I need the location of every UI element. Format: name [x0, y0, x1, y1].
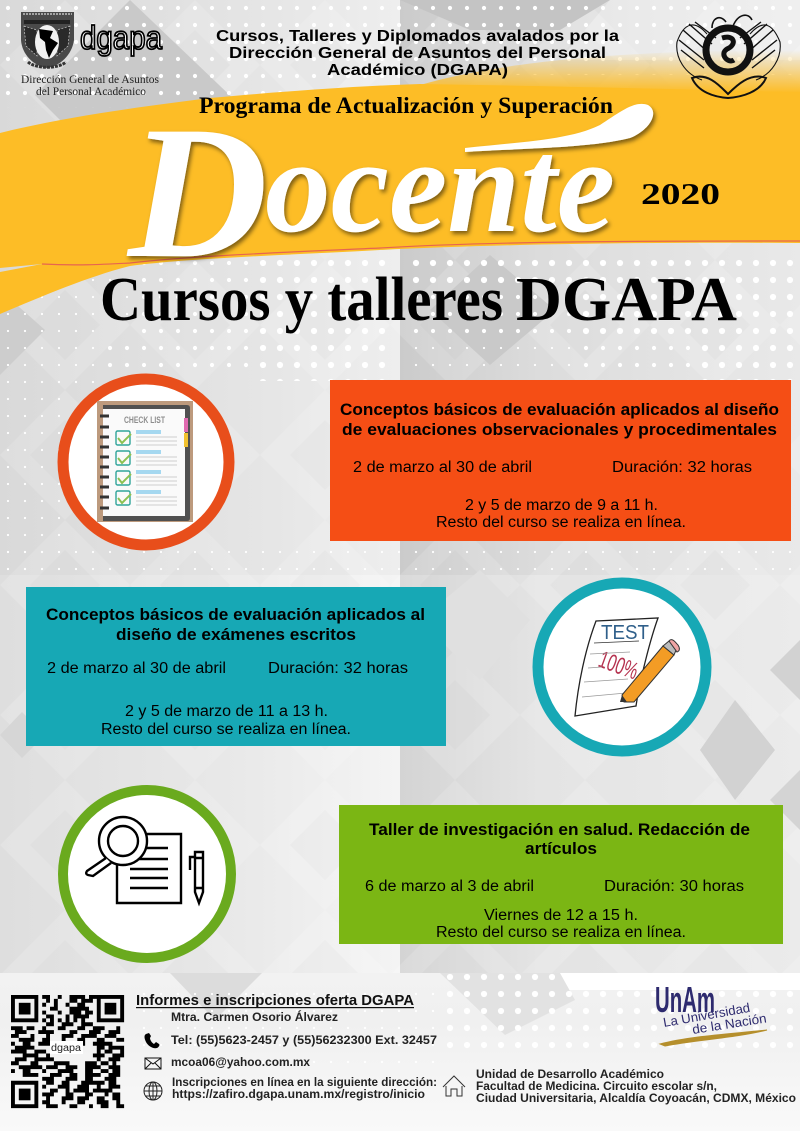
- panel: curso 1: de evaluaciones observacionales y procedimentales: [342, 420, 777, 439]
- panel: curso 1: Resto del curso se realiza en línea.: [436, 514, 686, 531]
- logo: UNAM crest left: [21, 12, 74, 68]
- panel: taller: Taller de investigación en salud. Redacción de: [369, 820, 750, 839]
- email text: mcoa06@yahoo.com.mx: [171, 1057, 311, 1069]
- panel: curso 2: Duración: 32 horas: [268, 660, 408, 677]
- panel: curso 2: 2 y 5 de marzo de 11 a 13 h.: [125, 703, 328, 720]
- registration text: Inscripciones en línea en la siguiente dirección:: [172, 1077, 437, 1089]
- contact name: Mtra. Carmen Osorio Álvarez: [171, 1011, 338, 1024]
- panel: curso 2: diseño de exámenes escritos: [116, 625, 356, 644]
- icon: checklist circle: [63, 379, 229, 545]
- logo: dgapa wordmark: dgapa: [80, 19, 163, 56]
- panel: taller: Resto del curso se realiza en línea.: [436, 924, 686, 941]
- QR code: dgapa: [51, 1043, 81, 1054]
- panel: taller: [339, 805, 783, 944]
- icon: test circle: TEST: [601, 622, 649, 644]
- panel: taller: 6 de marzo al 3 de abril: [365, 878, 534, 895]
- program subtitle: Programa de Actualización y Superación: [199, 93, 613, 118]
- registration text: [172, 1077, 437, 1101]
- header text: Dirección General de Asuntos del Personal: [229, 45, 606, 62]
- title: Docente: D: [126, 88, 268, 298]
- title: Docente: [126, 88, 653, 298]
- footer background: [0, 973, 800, 1131]
- icon: globe: [144, 1082, 162, 1100]
- logo caption: [21, 74, 160, 98]
- panel: curso 1: 2 de marzo al 30 de abril: [353, 459, 532, 476]
- yellow brush stroke banner: [0, 50, 800, 314]
- panel: taller: Viernes de 12 a 15 h.: [484, 907, 638, 924]
- QR code: [11, 995, 124, 1108]
- heading: cursos y talleres: [100, 266, 737, 334]
- icon: research circle: [63, 790, 231, 958]
- panel: curso 2: 2 de marzo al 30 de abril: [47, 660, 226, 677]
- address text: Unidad de Desarrollo Académico: [476, 1069, 664, 1081]
- logo: medicine faculty crest right: [677, 15, 780, 98]
- icon: test circle: [538, 583, 706, 751]
- address text: Ciudad Universitaria, Alcaldía Coyoacán, CDMX, México: [476, 1093, 796, 1105]
- registration text: https://zafiro.dgapa.unam.mx/registro/inicio: [172, 1089, 425, 1101]
- panel: taller: artículos: [525, 839, 597, 858]
- heading: cursos y talleres: Cursos y talleres: [100, 266, 503, 334]
- panel: curso 1: [330, 380, 791, 541]
- logo: UNAM la universidad de la nación: de la Nación: [691, 1010, 768, 1037]
- panel: curso 2: Resto del curso se realiza en línea.: [101, 721, 351, 738]
- icon: mail: [145, 1058, 161, 1069]
- panel: curso 2: [26, 587, 446, 746]
- panel: curso 1: 2 y 5 de marzo de 9 a 11 h.: [465, 497, 658, 514]
- panel: taller: Duración: 30 horas: [604, 878, 744, 895]
- icon: house: [443, 1076, 465, 1096]
- contact heading: Informes e inscripciones oferta DGAPA: [136, 992, 414, 1009]
- heading: cursos y talleres: DGAPA: [516, 266, 737, 334]
- icon: phone: [144, 1033, 159, 1048]
- icon: test circle: 100%: [595, 646, 642, 685]
- panel: curso 1: Duración: 32 horas: [612, 459, 752, 476]
- address text: Facultad de Medicina. Circuito escolar s/n,: [476, 1081, 717, 1093]
- logo: UNAM la universidad de la nación: La Universidad: [662, 1000, 751, 1030]
- logo caption: del Personal Académico: [36, 86, 146, 98]
- logo: UNAM la universidad de la nación: [655, 979, 768, 1046]
- logo: UNAM la universidad de la nación: UnAm: [655, 979, 715, 1020]
- year: 2020: [641, 176, 720, 211]
- panel: curso 1: Conceptos básicos de evaluación aplicados al diseño: [340, 400, 779, 419]
- phone text: Tel: (55)5623-2457 y (55)56232300 Ext. 32457: [171, 1035, 437, 1047]
- title: Docente: ocente: [265, 112, 615, 261]
- logo caption: Dirección General de Asuntos: [21, 74, 160, 86]
- icon: checklist circle: CHECK LIST: [124, 415, 165, 426]
- panel: curso 2: Conceptos básicos de evaluación aplicados al: [46, 605, 425, 624]
- address text: [476, 1069, 796, 1105]
- header text: Académico (DGAPA): [327, 62, 508, 79]
- header text: [216, 28, 619, 79]
- header text: Cursos, Talleres y Diplomados avalados por la: [216, 28, 619, 45]
